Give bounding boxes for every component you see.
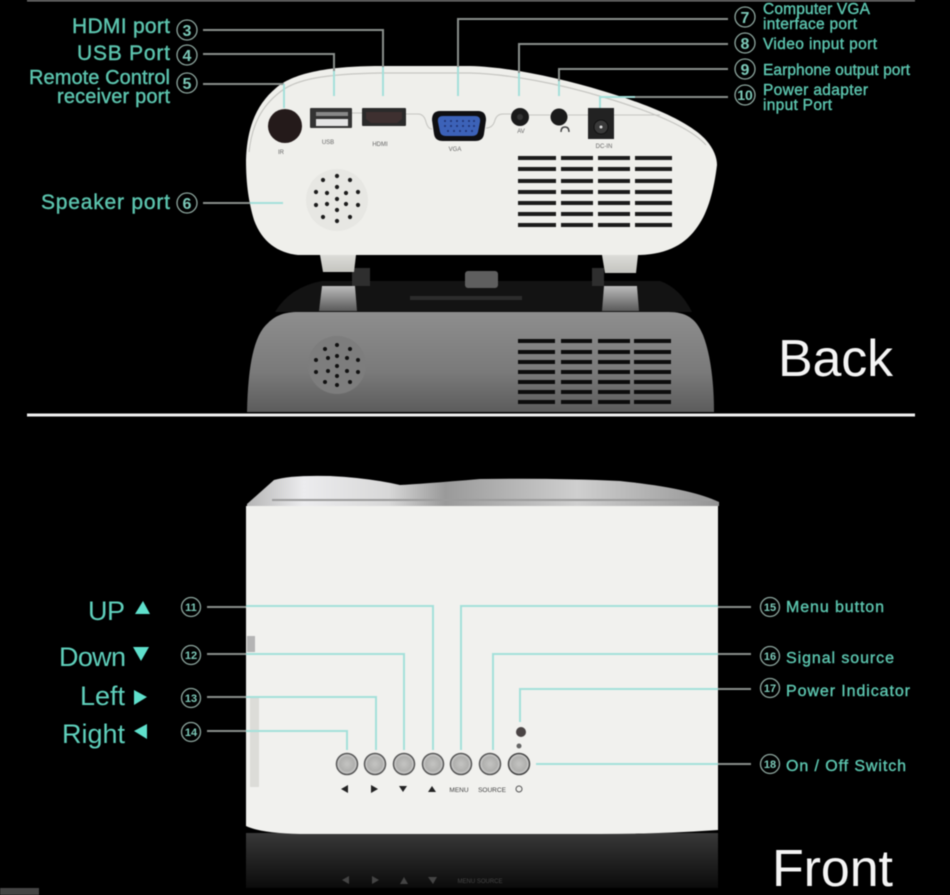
back body: [246, 66, 717, 255]
label: On / Off Switch: On / Off Switch: [786, 758, 906, 775]
USB port: [310, 108, 352, 146]
label: Earphone output port: [559, 59, 911, 96]
back view projector: [246, 66, 717, 412]
label: USB Port: USB Port: [77, 42, 170, 65]
label: Computer VGA interface port: interface port: [763, 16, 858, 33]
back view right labels: [458, 1, 911, 114]
side grooves: [247, 636, 259, 787]
port panel seam: [352, 113, 660, 129]
divider: [27, 414, 915, 416]
AV port: AV: [517, 129, 525, 135]
corner artifact: [0, 888, 39, 895]
IR port: [268, 109, 302, 156]
label: Speaker port: 6: [183, 196, 192, 213]
label: Computer VGA interface port: Computer VGA: [763, 1, 871, 18]
HDMI port: [362, 108, 406, 148]
front view right labels: [461, 598, 911, 775]
control buttons: [336, 754, 530, 774]
label: Power adapter input Port: Power adapter: [763, 82, 868, 99]
label: Menu button: 15: [764, 602, 776, 614]
DC power port: DC-IN: [596, 144, 612, 150]
label: Remote Control receiver port: [29, 67, 284, 108]
ventilation slots: [518, 156, 672, 227]
USB port: USB: [322, 140, 334, 146]
back view left labels: [29, 15, 383, 214]
label: Remote Control receiver port: 5: [183, 76, 192, 93]
label: Left: [80, 681, 376, 750]
VGA port: [432, 111, 486, 153]
label: Computer VGA interface port: 7: [741, 10, 750, 27]
power indicator LED: [516, 727, 526, 748]
top edge line: [27, 0, 915, 2]
white front body: [246, 506, 718, 834]
label: Computer VGA interface port: [458, 1, 871, 96]
label: Left: 13: [185, 693, 197, 705]
label: Power Indicator: Power Indicator: [786, 683, 911, 700]
button legends: SOURCE: [478, 787, 507, 794]
label: Power adapter input Port: input Port: [763, 97, 833, 114]
label: Down: [59, 642, 404, 750]
label: Menu button: Menu button: [786, 599, 884, 616]
label: Power Indicator: [520, 678, 911, 722]
HDMI port: HDMI: [372, 142, 388, 148]
reflection of front of projector: [246, 833, 718, 888]
label: Down: Down: [59, 642, 126, 672]
IR port: IR: [278, 150, 285, 156]
front view left labels: [59, 596, 433, 750]
VGA port: VGA: [449, 147, 461, 153]
label: Power Indicator: 17: [764, 683, 776, 695]
label: Right: [62, 719, 347, 750]
label: Earphone output port: 9: [741, 62, 750, 79]
label: Video input port: [519, 33, 878, 96]
button legends: [341, 785, 522, 794]
label: USB Port: 4: [183, 48, 192, 65]
label: Right: 14: [185, 727, 198, 739]
label: Left: Left: [80, 681, 125, 711]
label: Down: 12: [185, 650, 197, 662]
label: UP: UP: [88, 596, 125, 626]
label: HDMI port: 3: [183, 23, 192, 40]
heading: Back: Back: [778, 330, 894, 388]
silver top of projector: [247, 476, 719, 506]
label: Video input port: 8: [741, 36, 750, 53]
DC power port: [588, 108, 614, 150]
label: Speaker port: [41, 191, 283, 214]
label: Signal source: [493, 646, 894, 750]
button legends: MENU: [449, 787, 469, 794]
speaker grille: [306, 169, 368, 231]
label: Video input port: Video input port: [763, 36, 878, 53]
AV port: [511, 108, 529, 135]
label: Right: Right: [62, 719, 125, 749]
label: Signal source: 16: [764, 651, 776, 663]
label: HDMI port: [72, 15, 383, 96]
front view projector: [246, 476, 719, 888]
label: Earphone output port: Earphone output port: [763, 62, 911, 79]
label: Signal source: Signal source: [786, 650, 894, 667]
reflection of back of projector: [247, 271, 714, 412]
projector feet: [319, 255, 639, 311]
earphone port: [550, 108, 569, 132]
label: On / Off Switch: 18: [764, 759, 776, 771]
label: Remote Control receiver port: receiver port: [57, 86, 170, 108]
label: HDMI port: HDMI port: [72, 15, 170, 38]
label: Menu button: [461, 598, 884, 750]
label: Remote Control receiver port: Remote Control: [29, 67, 170, 89]
label: Speaker port: Speaker port: [41, 191, 170, 214]
label: Power adapter input Port: [600, 82, 868, 114]
label: Power adapter input Port: 10: [737, 87, 753, 103]
label: UP: [88, 596, 433, 750]
label: USB Port: [77, 42, 334, 96]
reflection of front of projector: MENU SOURCE: [457, 879, 503, 885]
label: On / Off Switch: [536, 754, 906, 775]
label: UP: 11: [185, 602, 197, 614]
